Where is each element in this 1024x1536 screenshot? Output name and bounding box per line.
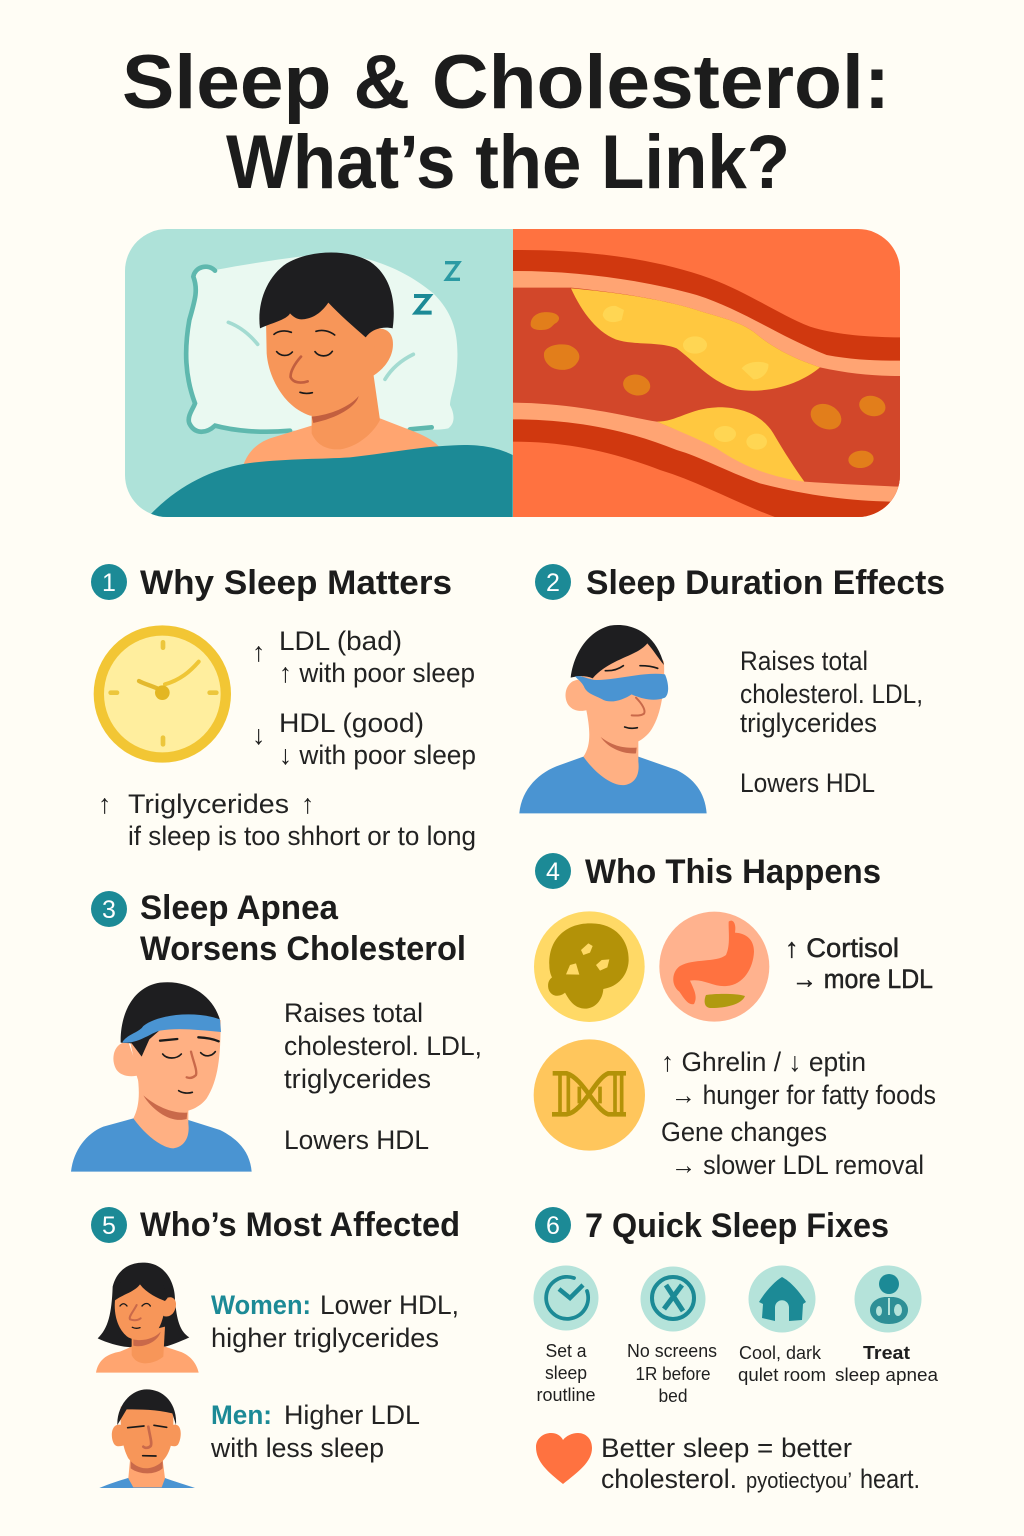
fix: cool dark quiet room [738,1266,826,1385]
man portrait [99,1389,195,1488]
fix: sleep routine: Set a [546,1341,587,1361]
panel: who this happens [534,853,936,1180]
title: What’s the Link? [226,120,790,205]
panel: sleep apnea worsens cholesterol [71,889,482,1172]
closing message [601,1433,920,1494]
ear [372,328,393,376]
fix: no screens [627,1266,717,1406]
heading: Sleep Apnea [140,889,339,927]
triglycerides text: ↑ [301,789,314,819]
heading: Sleep Duration Effects [586,564,945,602]
cortisol text: ↑ Cortisol [785,933,899,963]
number badge 6: 6 [546,1212,560,1240]
cortisol text: → more LDL [792,964,933,994]
men text: Higher LDL [284,1400,420,1430]
cholesterol particles [531,312,888,469]
number badge 2: 2 [546,569,560,597]
artery outer wall [513,250,900,520]
HDL text [252,708,476,770]
heading: Worsens Cholesterol [140,930,466,968]
duration effects text: Raises total [740,646,868,676]
cortisol text [785,933,933,994]
blanket [150,445,513,517]
fix: sleep routine [534,1266,598,1405]
hair [259,252,394,337]
number badge 2 [535,564,571,600]
title: Sleep & Cholesterol: [122,40,890,125]
duration effects text: cholesterol. LDL, [740,679,923,709]
HDL text: ↓ [252,720,266,750]
lower plaque [657,407,804,482]
ghrelin and gene text: → slower LDL removal [671,1150,924,1180]
triglycerides text: if sleep is too shhort or to long [128,821,476,851]
fix: treat sleep apnea: Treat [863,1343,910,1363]
fix: sleep routine: sleep [545,1363,587,1383]
men text: Men: [211,1400,272,1430]
number badge 4: 4 [546,858,560,886]
triglycerides text [98,789,476,851]
number badge 3 [91,891,127,927]
HDL text: ↓ with poor sleep [279,740,476,770]
shoulders [244,418,439,464]
pillow [186,253,457,432]
fix: no screens: bed [658,1386,688,1406]
number badge 5 [91,1207,127,1243]
duration effects text: triglycerides [740,708,877,738]
closed eyes and mouth [274,330,335,393]
person with eye mask [519,625,707,813]
panel: who's most affected [91,1206,460,1488]
icon: stomach [659,912,769,1022]
number badge 4 [535,853,571,889]
women text: Lower HDL, [320,1290,459,1320]
ghrelin and gene text [661,1047,936,1180]
heading: Why Sleep Matters [140,564,452,602]
closing message: cholesterol. [601,1464,737,1494]
fix: cool dark quiet room: qulet room [738,1365,826,1385]
triglycerides text: ↑ [98,789,112,819]
LDL text: ↑ [252,637,266,667]
face [266,302,361,416]
LDL text: ↑ with poor sleep [279,658,475,688]
fix: no screens: No screens [627,1341,717,1361]
closing message: heart. [860,1464,920,1494]
icon: DNA [534,1039,645,1151]
men text: with less sleep [210,1433,384,1463]
heading: Who This Happens [585,853,881,891]
women text [211,1290,459,1353]
closing message: Better sleep = better [601,1433,852,1463]
panel: sleep duration effects [519,564,945,813]
fix: treat sleep apnea: sleep apnea [835,1365,939,1385]
panel: 7 quick sleep fixes [534,1207,939,1494]
hero illustration [125,228,901,520]
women text: higher triglycerides [211,1323,439,1353]
number badge 1: 1 [102,569,116,597]
heading: 7 Quick Sleep Fixes [585,1207,889,1245]
artery inner wall [513,271,900,502]
plaque highlights [603,306,768,450]
number badge 3: 3 [102,896,116,924]
apnea effects text [284,998,482,1155]
fix: sleep routine: routline [536,1385,596,1405]
ghrelin and gene text: Gene changes [661,1117,827,1147]
duration effects text [740,646,923,798]
heading [140,889,466,968]
icon: clock [94,625,231,763]
women text: Women: [211,1290,311,1320]
artery panel [513,228,901,520]
apnea effects text: Raises total [284,998,423,1028]
closing message: pyotiectyou’ [746,1468,852,1493]
fix: no screens: 1R before [636,1364,710,1384]
apnea effects text: cholesterol. LDL, [284,1031,482,1061]
panel: why sleep matters [91,564,476,851]
men text [210,1400,420,1463]
title [122,40,890,205]
ghrelin and gene text: → hunger for fatty foods [671,1080,936,1110]
triglycerides text: Triglycerides [128,789,289,819]
number badge 6 [535,1207,571,1243]
blood channel [513,288,900,487]
fix: treat sleep apnea [835,1266,939,1385]
fix: cool dark quiet room: Cool, dark [739,1343,822,1363]
number badge 5: 5 [102,1212,116,1240]
HDL text: HDL (good) [279,708,424,738]
upper plaque [571,288,820,391]
icon: brain [534,911,645,1022]
person with headband [71,982,252,1172]
icon: heart [536,1433,592,1484]
neck [312,376,380,450]
apnea effects text: Lowers HDL [284,1125,429,1155]
number badge 1 [91,564,127,600]
sleep z letters [414,263,460,313]
ghrelin and gene text: ↑ Ghrelin / ↓ eptin [661,1047,866,1077]
heading: Who’s Most Affected [140,1206,460,1244]
duration effects text: Lowers HDL [740,768,875,798]
LDL text [252,626,475,688]
LDL text: LDL (bad) [279,626,402,656]
apnea effects text: triglycerides [284,1064,431,1094]
woman portrait [96,1263,199,1373]
sleeping person panel [125,228,513,518]
